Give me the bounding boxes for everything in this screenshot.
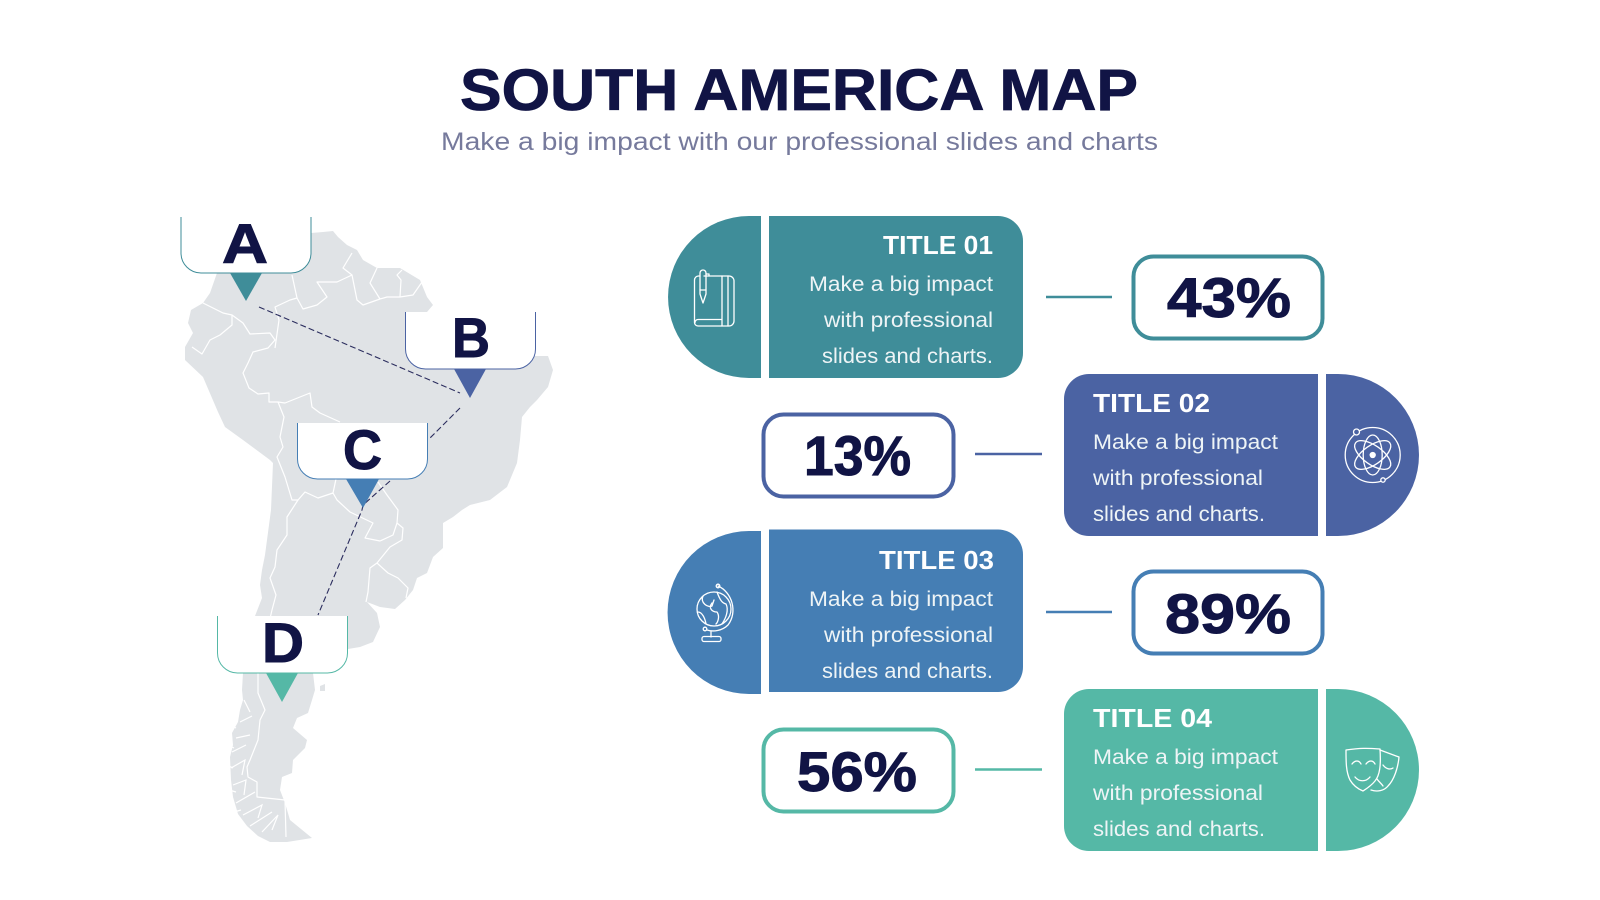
panel: title 03: with professional: [823, 624, 993, 647]
panel: title 01: TITLE 01: [883, 230, 993, 260]
panel: title 04: with professional: [1092, 782, 1263, 805]
map: South America: [185, 231, 553, 842]
value box 43%: 43%: [1167, 266, 1291, 329]
island: [320, 684, 325, 691]
subtitle: Make a big impact with our professional slides and charts: [441, 128, 1158, 156]
value box 13%: 13%: [804, 424, 911, 487]
panel: title 01: Make a big impact: [809, 273, 993, 296]
value box 89%: 89%: [1165, 582, 1291, 645]
map pin B: [406, 306, 536, 398]
panel: title 01: slides and charts.: [822, 345, 993, 368]
dashed route lines: [259, 307, 460, 615]
icon: notebook and pen: [694, 270, 734, 326]
title: SOUTH AMERICA MAP: [460, 58, 1138, 123]
country borders: [192, 253, 422, 837]
icon: globe: [697, 584, 733, 642]
panel: title 02: Make a big impact: [1093, 431, 1278, 454]
connector 02: [975, 453, 1042, 455]
value box 89%: [1134, 572, 1322, 654]
panel: title 04: TITLE 04: [1093, 703, 1213, 733]
connector 03: [1046, 611, 1112, 613]
map pin D: [218, 611, 348, 702]
fjords: [227, 700, 278, 832]
map pin A: A: [222, 212, 268, 275]
value box 56%: [764, 730, 954, 812]
icon: atom: [1345, 428, 1400, 482]
value box 13%: [764, 414, 954, 496]
panel: title 04: Make a big impact: [1093, 746, 1278, 769]
panel: title 01: [668, 216, 1023, 378]
panel: title 04: [1064, 689, 1419, 851]
panel: title 02: [1064, 374, 1419, 536]
panel: title 04: slides and charts.: [1093, 818, 1265, 841]
map pin A: [181, 212, 311, 301]
connector 01: [1046, 296, 1112, 298]
map pin D: D: [262, 611, 304, 674]
connector 04: [975, 768, 1042, 771]
icon: theatre masks: [1346, 748, 1399, 791]
panel: title 03: Make a big impact: [809, 588, 993, 611]
value box 56%: 56%: [797, 740, 917, 803]
panel: title 03: slides and charts.: [822, 660, 993, 683]
value box 43%: [1134, 256, 1322, 338]
panel: title 02: slides and charts.: [1093, 503, 1265, 526]
panel: title 03: [668, 530, 1023, 694]
map pin C: [298, 418, 428, 508]
panel: title 02: TITLE 02: [1093, 388, 1210, 418]
panel: title 01: with professional: [823, 309, 993, 332]
map pin B: B: [452, 306, 490, 369]
map pin C: C: [343, 418, 382, 481]
panel: title 03: TITLE 03: [879, 545, 994, 575]
panel: title 02: with professional: [1092, 467, 1263, 490]
